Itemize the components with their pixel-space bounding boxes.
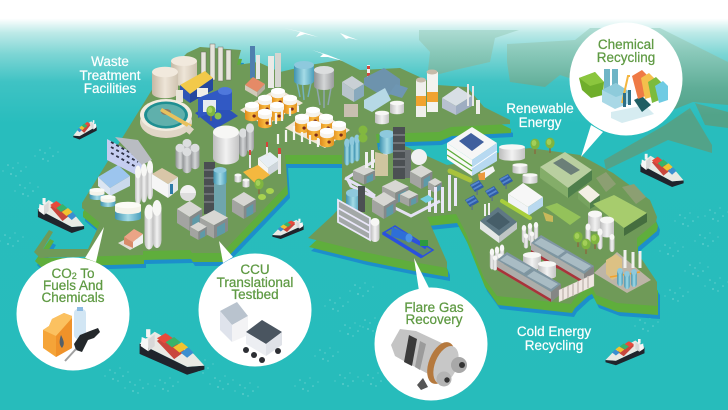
central refinery xyxy=(338,126,457,257)
water sparkle texture xyxy=(0,147,728,397)
callout: chemical recycling xyxy=(570,22,682,157)
heading: flare gas recovery: Flare Gas xyxy=(404,300,464,315)
ship near treatment xyxy=(73,120,97,139)
icon: recycling plant and bins xyxy=(579,69,668,123)
label: waste treatment facilities: Waste xyxy=(91,54,129,69)
cold energy sheds xyxy=(490,222,600,302)
container ship right xyxy=(640,154,684,187)
icon: testbed container and cart xyxy=(220,302,282,363)
storage tanks and trees xyxy=(499,138,555,184)
upper central plant xyxy=(342,65,480,124)
blue process building xyxy=(195,87,238,129)
distant landforms xyxy=(419,28,728,170)
callout: ccu translational testbed xyxy=(198,241,312,366)
label: cold energy recycling: Recycling xyxy=(525,338,583,353)
white sphere xyxy=(180,185,196,201)
dark roof factory xyxy=(480,203,517,243)
icon: fuel can, bottle and nozzle xyxy=(43,307,100,361)
heading: co2 to fuels and chemicals: CO xyxy=(51,266,95,281)
green industrial island xyxy=(34,47,660,319)
dark lattice tower xyxy=(393,127,411,179)
blue flare gas rig xyxy=(383,226,433,257)
left tank and lattice xyxy=(346,186,396,219)
truck and hedge xyxy=(450,166,495,180)
container ship lower right xyxy=(606,339,644,365)
grey process units xyxy=(353,150,388,184)
trees xyxy=(358,126,368,142)
tanker upper left xyxy=(38,198,84,233)
icon: gas compressor xyxy=(391,329,467,390)
lavender frame unit xyxy=(338,200,370,240)
beige tanks xyxy=(171,56,197,86)
heading: ccu translational testbed: Testbed xyxy=(231,287,279,302)
green recycling plant xyxy=(540,152,647,236)
heading: co2 to fuels and chemicals: To xyxy=(77,266,95,281)
heading: ccu translational testbed: Translational xyxy=(217,275,293,290)
heading: co2 to fuels and chemicals: Fuels And xyxy=(43,278,103,293)
white pipe rack xyxy=(270,106,318,147)
blue cylinders xyxy=(344,134,360,166)
clarifier xyxy=(140,99,194,138)
pylon columns xyxy=(201,44,231,82)
heading: chemical recycling: Recycling xyxy=(597,50,655,65)
white tank cluster xyxy=(586,210,614,252)
white office xyxy=(152,168,178,198)
refinery stacks xyxy=(245,46,281,97)
grey blue factory xyxy=(442,84,480,115)
white hall xyxy=(502,183,543,218)
heading: chemical recycling: Chemical xyxy=(598,37,654,52)
label: renewable energy: Energy xyxy=(519,115,562,130)
blue hall xyxy=(98,165,130,196)
water towers xyxy=(294,61,334,108)
label: cold energy recycling: Cold Energy xyxy=(517,324,591,339)
lavender lattice building xyxy=(107,137,152,178)
container ship centre xyxy=(272,219,304,239)
label: waste treatment facilities: Treatment xyxy=(79,68,141,83)
lng terminal xyxy=(594,250,651,293)
grey plant buildings xyxy=(177,192,256,240)
large silver tank xyxy=(213,123,254,164)
tall orange stacks xyxy=(416,70,438,117)
label: waste treatment facilities: Facilities xyxy=(84,81,137,96)
pink building xyxy=(118,229,143,250)
solar office building xyxy=(447,127,497,176)
heading: co2 to fuels and chemicals: Chemicals xyxy=(41,290,105,305)
small factory xyxy=(234,142,281,200)
waste treatment plant xyxy=(140,44,350,173)
white silos xyxy=(135,160,153,204)
label: renewable energy: Renewable xyxy=(506,101,574,116)
lattice towers xyxy=(204,162,226,218)
twin stack silos xyxy=(144,200,162,250)
small white tank xyxy=(370,218,380,242)
refinery halls xyxy=(382,165,442,206)
orange tanks group two xyxy=(285,107,350,148)
white sphere xyxy=(411,149,427,165)
seagulls xyxy=(284,28,358,61)
pipe towers xyxy=(428,175,457,213)
grey silos xyxy=(176,139,200,173)
small teal pool xyxy=(420,195,434,203)
lavender pipe road xyxy=(345,150,440,216)
callout: co2 to fuels and chemicals xyxy=(16,227,130,370)
lower left industrial block xyxy=(90,137,281,250)
shore tanks xyxy=(90,188,141,221)
heading: flare gas recovery: Recovery xyxy=(405,312,463,327)
orange tanks group one xyxy=(240,88,303,128)
solar panels xyxy=(465,174,513,210)
tanker bottom xyxy=(140,329,204,375)
teal tower tank xyxy=(380,130,394,154)
yellow roof blue building xyxy=(176,71,213,103)
heading: ccu translational testbed: CCU xyxy=(240,262,270,277)
heading: co2 to fuels and chemicals: 2 xyxy=(72,271,77,281)
callout: flare gas recovery xyxy=(374,258,488,400)
